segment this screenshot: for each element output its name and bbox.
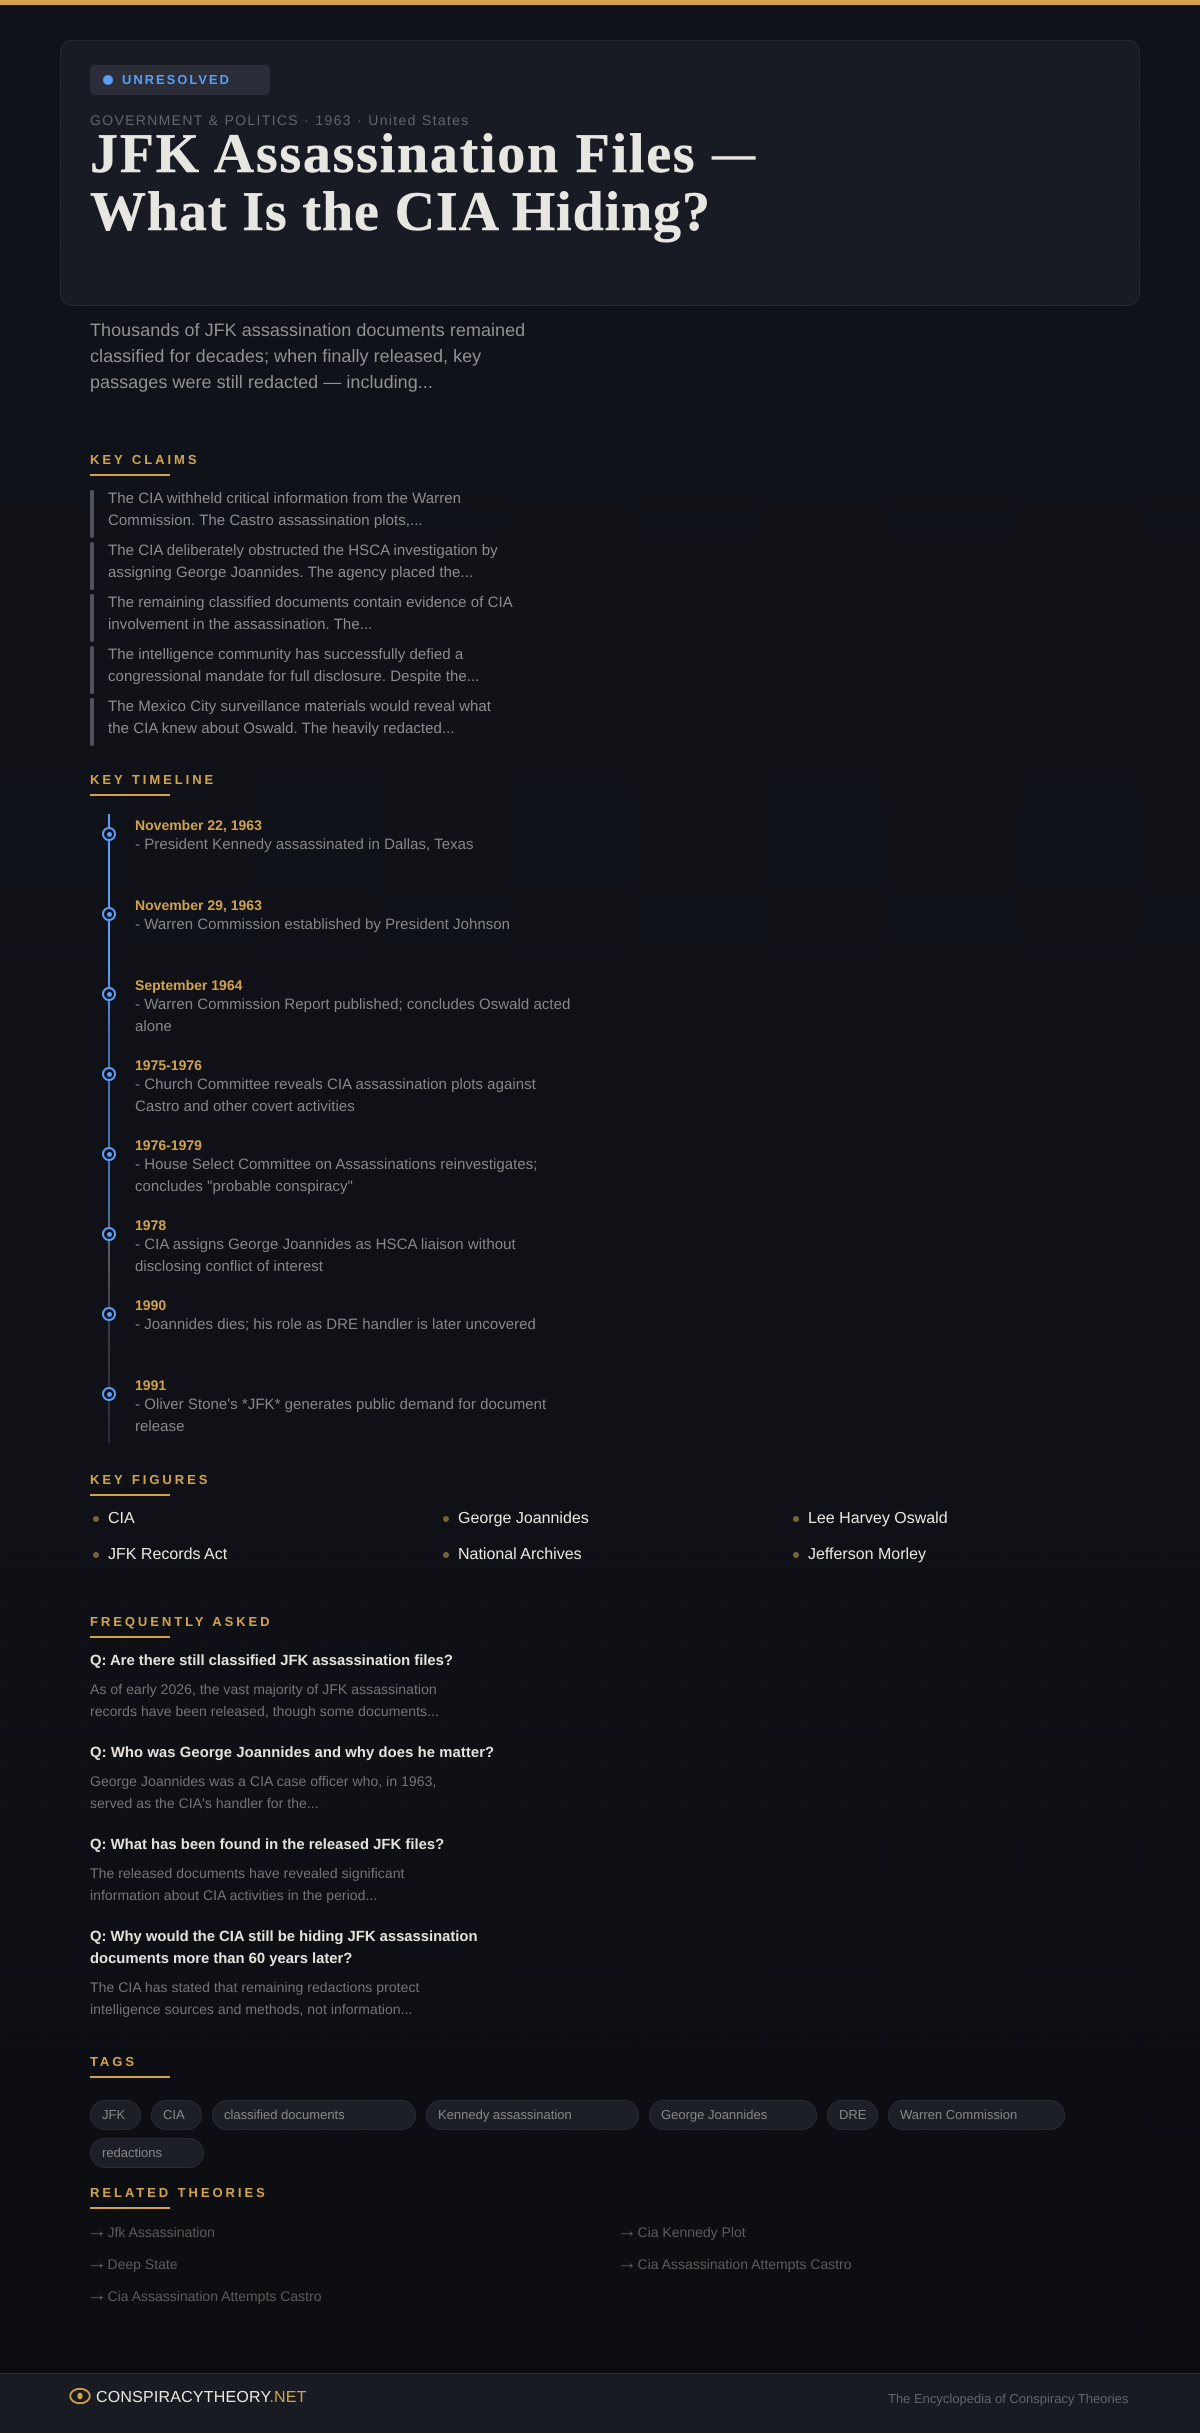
answer 1: records have been released, though some documents... xyxy=(90,1703,439,1719)
tag: redactions: redactions xyxy=(102,2145,162,2160)
claim 4: The intelligence community has successfully defied a xyxy=(108,646,463,663)
icon: status dot xyxy=(103,75,113,85)
claim 4: congressional mandate for full disclosure. Despite the... xyxy=(108,668,479,685)
event: September 1964: September 1964 xyxy=(135,977,242,993)
event: 1978: 1978 xyxy=(135,1217,166,1233)
figure: Lee Harvey Oswald: Lee Harvey Oswald xyxy=(808,1510,948,1527)
tag: Kennedy assassination: Kennedy assassination xyxy=(438,2107,572,2122)
question 2: Q: Who was George Joannides and why does he matter? xyxy=(90,1745,494,1761)
panel: key claims xyxy=(90,452,513,746)
link: Cia Kennedy Plot: → xyxy=(617,2220,637,2242)
event: November 22, 1963 xyxy=(102,817,474,853)
event: 1976-1979: - House Select Committee on Assassinations reinvestigates; concludes "probable conspiracy" xyxy=(135,1156,538,1195)
event: 1991 xyxy=(102,1377,546,1435)
claim 4 xyxy=(90,646,479,694)
link: Deep State: → xyxy=(87,2252,107,2274)
answer 2: served as the CIA's handler for the... xyxy=(90,1795,319,1811)
claim 5: The Mexico City surveillance materials would reveal what xyxy=(108,698,491,715)
claim 3: involvement in the assassination. The... xyxy=(108,616,372,633)
link: Cia Kennedy Plot xyxy=(617,2220,746,2242)
panel: related theories xyxy=(87,2185,852,2306)
panel: frequently asked xyxy=(90,1614,494,2017)
link: Cia Assassination Attempts Castro (left): Cia Assassination Attempts Castro xyxy=(108,2288,322,2304)
claim 2 xyxy=(90,542,498,590)
answer 2: George Joannides was a CIA case officer who, in 1963, xyxy=(90,1773,436,1789)
panel: header card xyxy=(60,40,1140,306)
heading: tags: TAGS xyxy=(90,2054,137,2069)
answer 2 xyxy=(90,1773,436,1811)
question 4: Q: Why would the CIA still be hiding JFK assassination xyxy=(90,1929,478,1945)
event: 1990: - Joannides dies; his role as DRE handler is later uncovered xyxy=(135,1316,536,1333)
event: 1978: - CIA assigns George Joannides as HSCA liaison without disclosing conflict of interest xyxy=(135,1236,516,1275)
figure: CIA: CIA xyxy=(108,1510,135,1527)
event: 1976-1979: 1976-1979 xyxy=(135,1137,202,1153)
event: 1991: - Oliver Stone's *JFK* generates public demand for document release xyxy=(135,1396,546,1435)
panel: key timeline xyxy=(90,772,570,1443)
tag: George Joannides xyxy=(649,2100,817,2130)
summary text xyxy=(90,320,525,392)
event: November 22, 1963: - President Kennedy assassinated in Dallas, Texas xyxy=(135,836,474,853)
badge label: UNRESOLVED xyxy=(122,72,231,87)
claim 5 xyxy=(90,698,491,746)
heading: frequently asked: FREQUENTLY ASKED xyxy=(90,1614,273,1629)
question 4 xyxy=(90,1929,478,1967)
claim 2: The CIA deliberately obstructed the HSCA investigation by xyxy=(108,542,498,559)
heading: key figures: KEY FIGURES xyxy=(90,1472,210,1487)
top accent bar xyxy=(0,0,1200,5)
figure: Jefferson Morley: Jefferson Morley xyxy=(808,1546,926,1563)
answer 4 xyxy=(90,1979,420,2017)
icon: eye logo xyxy=(69,2387,91,2405)
status badge: unresolved xyxy=(90,65,270,95)
figure: JFK Records Act: JFK Records Act xyxy=(108,1546,227,1563)
tag: JFK xyxy=(90,2100,141,2130)
event: 1976-1979 xyxy=(102,1137,538,1195)
event: September 1964: - Warren Commission Report published; concludes Oswald acted alone xyxy=(135,996,570,1035)
footer xyxy=(0,2373,1200,2433)
timeline spine xyxy=(108,814,110,1443)
question 1: Q: Are there still classified JFK assassination files? xyxy=(90,1653,453,1669)
figure: George Joannides: George Joannides xyxy=(458,1510,589,1527)
question 3: Q: What has been found in the released JFK files? xyxy=(90,1837,444,1853)
link: Jfk Assassination: Jfk Assassination xyxy=(108,2224,215,2240)
link: Deep State xyxy=(90,2254,178,2274)
heading: key claims: KEY CLAIMS xyxy=(90,452,199,467)
logo wordmark: CONSPIRACYTHEORY.NET xyxy=(96,2389,307,2406)
title xyxy=(90,122,756,242)
event: 1975-1976 xyxy=(102,1057,536,1115)
heading: related theories: RELATED THEORIES xyxy=(90,2185,268,2200)
link: Cia Assassination Attempts Castro (right): → xyxy=(617,2252,637,2274)
tag: CIA: CIA xyxy=(163,2107,185,2122)
event: September 1964 xyxy=(102,977,570,1035)
tag: CIA xyxy=(151,2100,202,2130)
summary text: passages were still redacted — including... xyxy=(90,372,433,392)
link: Deep State: Deep State xyxy=(108,2256,178,2272)
claim 5: the CIA knew about Oswald. The heavily redacted... xyxy=(108,720,455,737)
claim 1 xyxy=(90,490,461,538)
figure: National Archives: National Archives xyxy=(458,1546,582,1563)
heading: key timeline: KEY TIMELINE xyxy=(90,772,216,787)
claim 3: The remaining classified documents contain evidence of CIA xyxy=(108,594,513,611)
figure: CIA xyxy=(93,1510,135,1527)
tag: classified documents xyxy=(212,2100,416,2130)
event: November 29, 1963: November 29, 1963 xyxy=(135,897,262,913)
claim 2: assigning George Joannides. The agency placed the... xyxy=(108,564,473,581)
tag: Warren Commission: Warren Commission xyxy=(900,2107,1017,2122)
footer tagline: The Encyclopedia of Conspiracy Theories xyxy=(888,2391,1128,2406)
tag: redactions xyxy=(90,2138,204,2168)
event: 1990 xyxy=(102,1297,536,1333)
link: Cia Assassination Attempts Castro (right): Cia Assassination Attempts Castro xyxy=(638,2256,852,2272)
category line: GOVERNMENT & POLITICS · 1963 · United States xyxy=(90,112,470,128)
link: Jfk Assassination: → xyxy=(87,2220,107,2242)
tag: DRE: DRE xyxy=(839,2107,866,2122)
summary text: Thousands of JFK assassination documents remained xyxy=(90,320,525,340)
answer 1: As of early 2026, the vast majority of JFK assassination xyxy=(90,1681,437,1697)
event: 1990: 1990 xyxy=(135,1297,166,1313)
tag: George Joannides: George Joannides xyxy=(661,2107,767,2122)
answer 1 xyxy=(90,1681,439,1719)
link: Cia Kennedy Plot: Cia Kennedy Plot xyxy=(638,2224,746,2240)
claim 1: The CIA withheld critical information from the Warren xyxy=(108,490,461,507)
answer 3: information about CIA activities in the period... xyxy=(90,1887,377,1903)
answer 3: The released documents have revealed significant xyxy=(90,1865,404,1881)
event: November 29, 1963 xyxy=(102,897,510,933)
question 4: documents more than 60 years later? xyxy=(90,1951,352,1967)
event: November 29, 1963: - Warren Commission established by President Johnson xyxy=(135,916,510,933)
title: What Is the CIA Hiding? xyxy=(90,180,711,242)
tag: Warren Commission xyxy=(888,2100,1065,2130)
answer 4: intelligence sources and methods, not information... xyxy=(90,2001,412,2017)
summary text: classified for decades; when finally released, key xyxy=(90,346,481,366)
panel: tags xyxy=(90,2054,1065,2168)
event: 1978 xyxy=(102,1217,516,1275)
tag: classified documents: classified documents xyxy=(224,2107,345,2122)
event: November 22, 1963: November 22, 1963 xyxy=(135,817,262,833)
claim 1: Commission. The Castro assassination plots,... xyxy=(108,512,423,529)
event: 1975-1976: 1975-1976 xyxy=(135,1057,202,1073)
tag: JFK: JFK xyxy=(102,2107,125,2122)
event: 1975-1976: - Church Committee reveals CIA assassination plots against Castro and other covert activities xyxy=(135,1076,536,1115)
tag: Kennedy assassination xyxy=(426,2100,639,2130)
link: Jfk Assassination xyxy=(87,2220,215,2242)
title: JFK Assassination Files — xyxy=(90,122,755,184)
claim 3 xyxy=(90,594,513,642)
panel: key figures xyxy=(90,1472,948,1563)
event: 1991: 1991 xyxy=(135,1377,166,1393)
answer 4: The CIA has stated that remaining redactions protect xyxy=(90,1979,419,1995)
link: Cia Assassination Attempts Castro (left): → xyxy=(87,2284,107,2306)
answer 3 xyxy=(90,1865,404,1903)
tag: DRE xyxy=(827,2100,878,2130)
